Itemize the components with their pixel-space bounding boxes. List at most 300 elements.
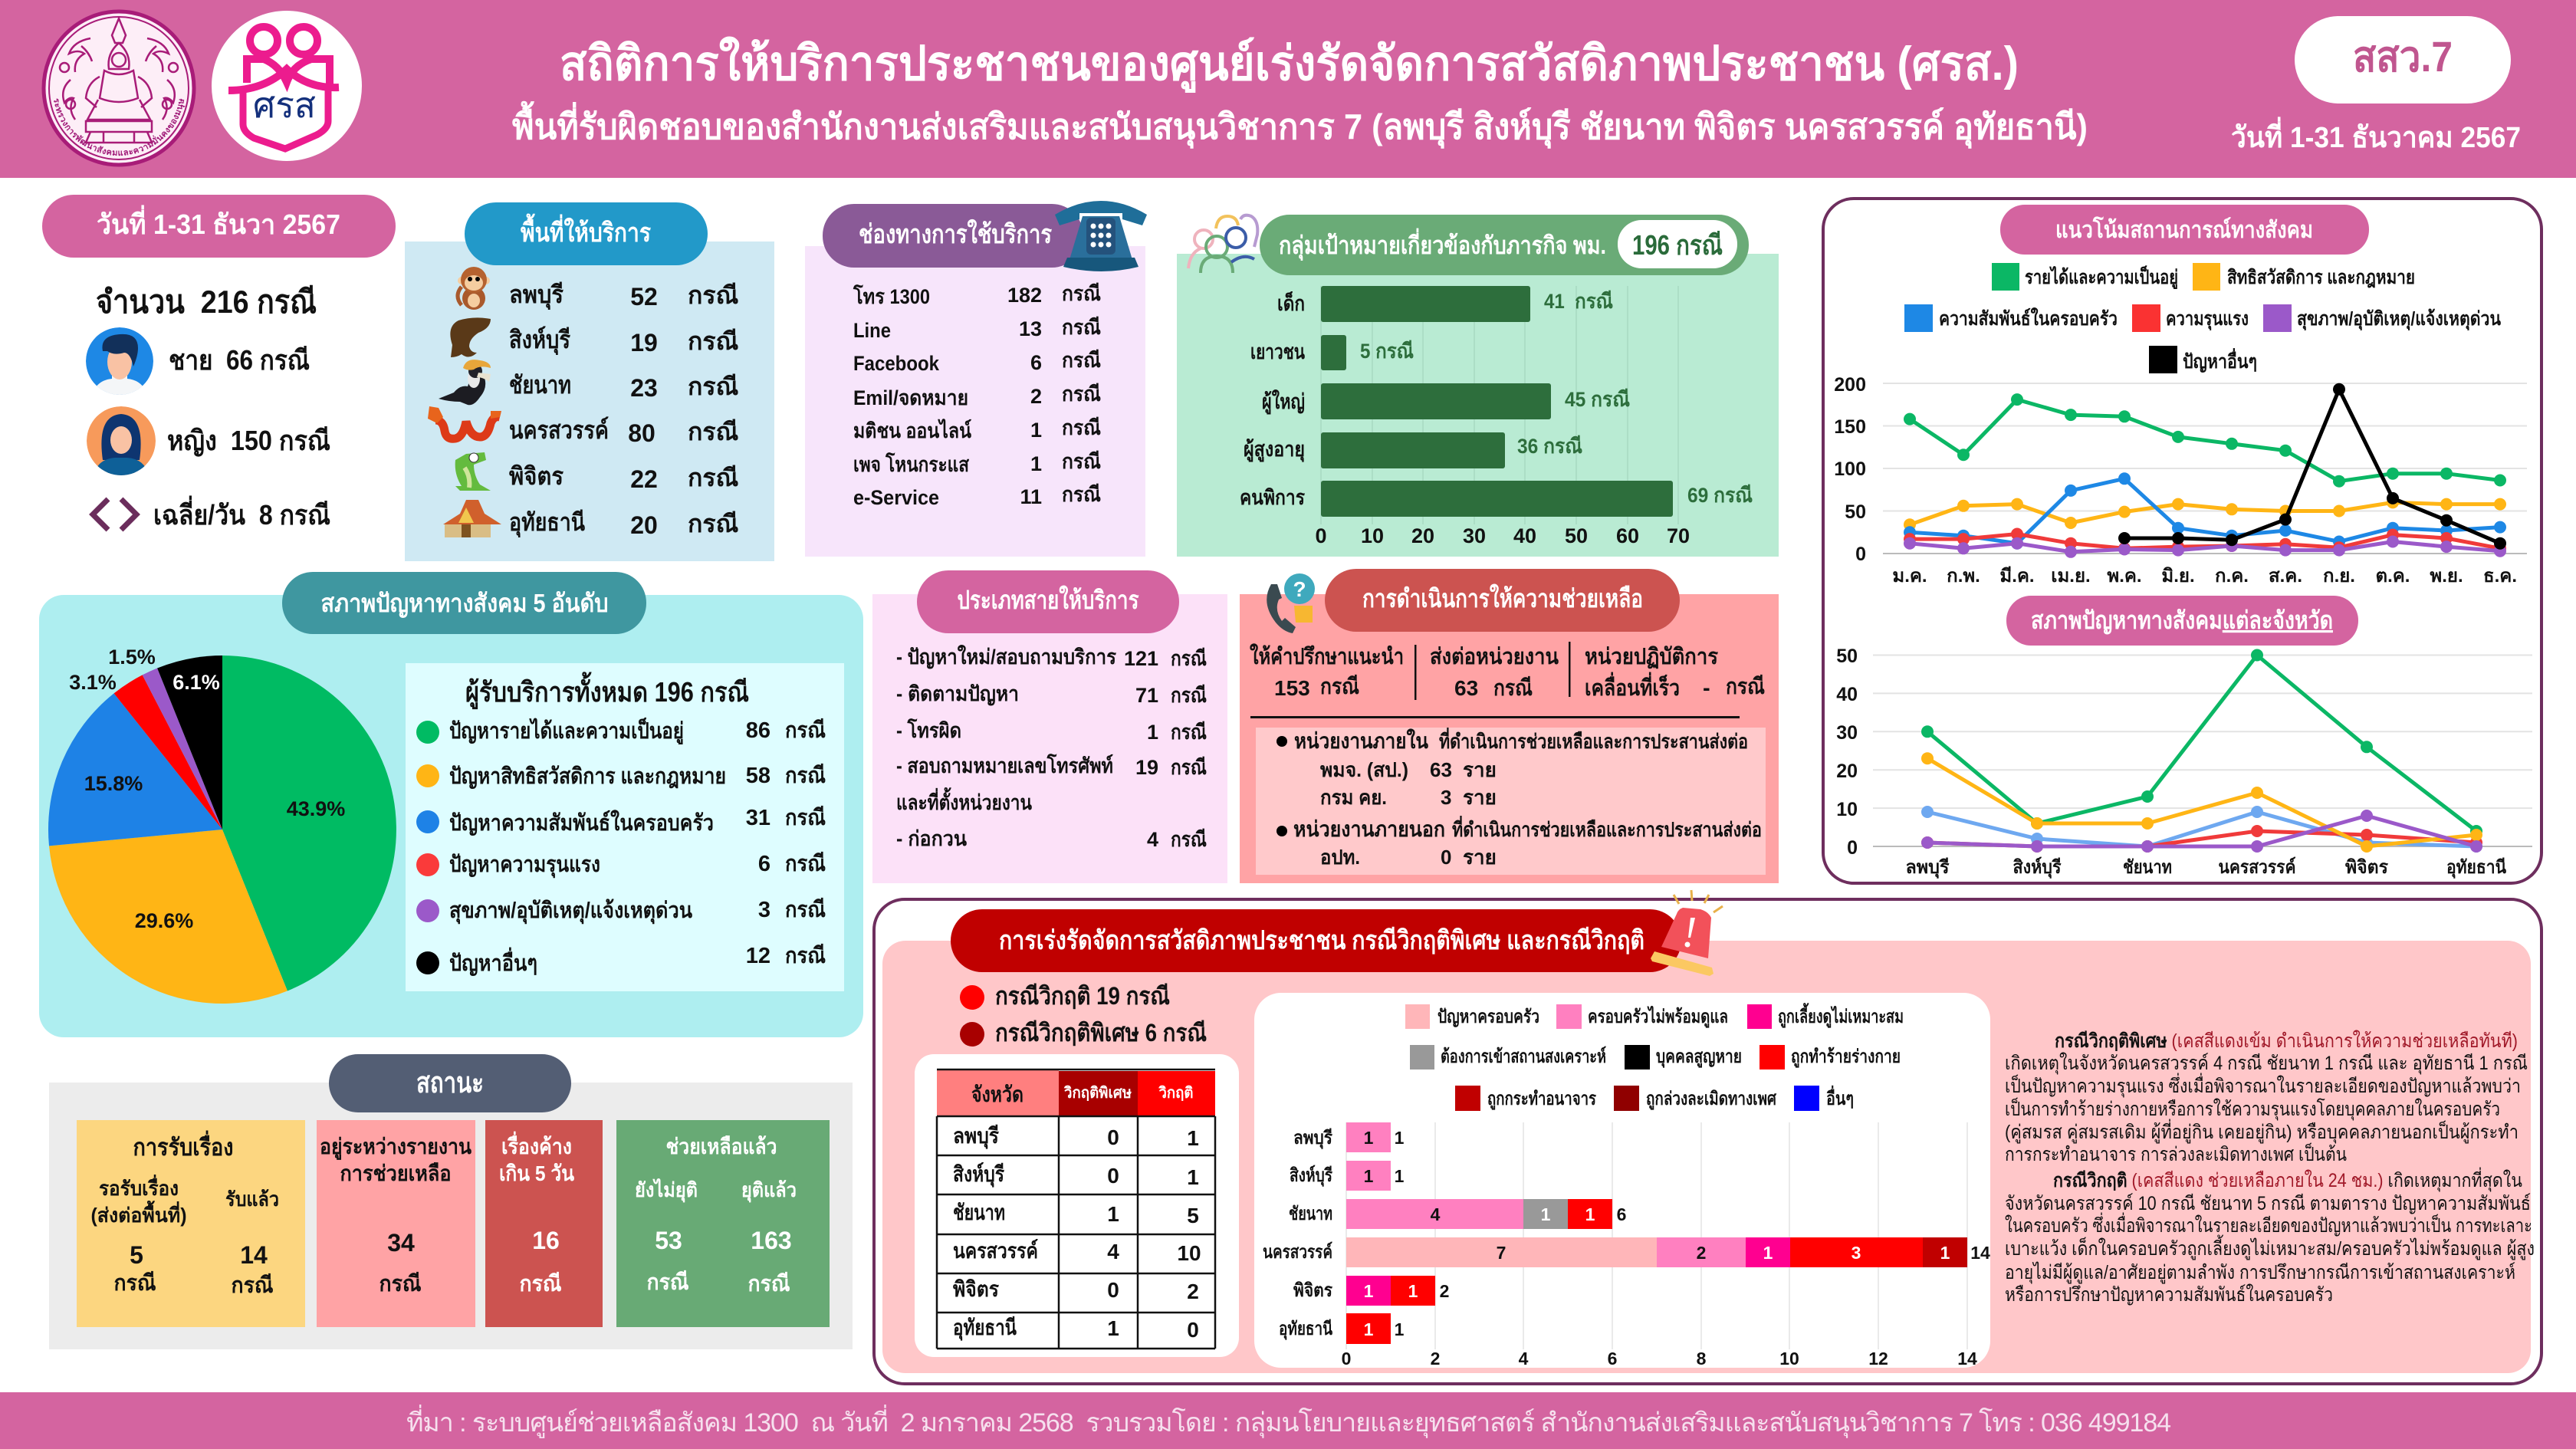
list: provinces: กรณี: [688, 464, 738, 491]
stats: assistance columns: หน่วยปฏิบัติการ: [1585, 645, 1718, 669]
line chart: monthly trend: 150: [1834, 416, 1866, 438]
legend: crisis types: อื่นๆ: [1826, 1085, 1854, 1109]
list: channels: กรณี: [1062, 416, 1101, 439]
panel: service types: [872, 570, 1227, 883]
list: channels: มติชน ออนไลน์: [853, 419, 971, 442]
table: crisis by province: 1: [1107, 1202, 1119, 1226]
panel: social trend charts: [1823, 199, 2542, 883]
line chart: per province: 50: [1836, 646, 1858, 667]
stacked bar chart: crisis types: 1: [1408, 1281, 1418, 1301]
bar chart: target groups: 41 กรณี: [1544, 290, 1613, 313]
stats: assistance columns: ให้คำปรึกษาแนะนำ: [1250, 643, 1404, 669]
panel: assisting agencies: พมจ. (สป.): [1320, 758, 1408, 781]
text block: crisis explanation: การกระทำอนาจาร การล่วงละเมิดทางเพศ เป็นต้น: [2005, 1142, 2347, 1165]
list: service types: - โทรผิด: [896, 718, 961, 742]
card: in progress: กรณี: [379, 1272, 422, 1296]
stats: assistance columns: 153: [1274, 676, 1310, 700]
bar chart: target groups: 45 กรณี: [1565, 388, 1630, 411]
list: service types: 71: [1135, 684, 1158, 707]
card: intake: 5: [130, 1241, 143, 1269]
icon: ministry seal: [41, 9, 196, 167]
list: service types: - สอบถามหมายเลขโทรศัพท์: [896, 753, 1113, 777]
line chart: per province: 0: [1847, 837, 1858, 859]
legend: issues: ผู้รับบริการทั้งหมด 196 กรณี: [465, 672, 749, 710]
text block: crisis explanation: หรือการปรึกษาปัญหาความสัมพันธ์ในครอบครัว: [2005, 1283, 2333, 1306]
card: intake: รอรับเรื่อง: [99, 1174, 179, 1200]
table: crisis by province: [915, 1054, 1239, 1357]
panel: assisting agencies: 63: [1430, 758, 1452, 781]
list: provinces: [509, 281, 738, 539]
stacked bar chart: crisis types: 1: [1364, 1128, 1374, 1148]
list: service types: และที่ตั้งหน่วยงาน: [896, 787, 1032, 814]
table: crisis by province: จังหวัด: [971, 1083, 1024, 1106]
bar chart: target groups: 30: [1463, 524, 1486, 547]
list: channels: กรณี: [1062, 383, 1101, 406]
bar chart: target groups: 69 กรณี: [1687, 484, 1753, 507]
legend: issues: สุขภาพ/อุบัติเหตุ/แจ้งเหตุด่วน: [449, 899, 692, 924]
badge: สสว.7: สสว.7: [2353, 32, 2453, 80]
list: channels: 182: [1007, 284, 1042, 307]
stacked bar chart: crisis types: 6: [1608, 1349, 1617, 1368]
legend: issues: 3: [758, 898, 770, 922]
table: crisis by province: ลพบุรี: [953, 1124, 999, 1149]
stacked bar chart: crisis types: 1: [1541, 1204, 1551, 1224]
table: crisis by province: วิกฤติพิเศษ: [1063, 1085, 1132, 1102]
list: provinces: กรณี: [688, 373, 738, 400]
stacked bar chart: crisis types: 14: [1970, 1243, 1990, 1263]
panel: assistance actions: [1240, 569, 1779, 883]
legend: crisis types: ครอบครัวไม่พร้อมดูแล: [1588, 1005, 1728, 1028]
table: crisis by province: นครสวรรค์: [953, 1239, 1038, 1263]
list: service types: - ปัญหาใหม่/สอบถามบริการ: [896, 645, 1116, 669]
heading: social issues: [282, 572, 646, 634]
list: provinces: นครสวรรค์: [509, 416, 609, 444]
list: provinces: สิงห์บุรี: [509, 326, 570, 356]
legend: issues: กรณี: [785, 764, 826, 788]
bar chart: target groups: ผู้ใหญ่: [1262, 389, 1305, 415]
card: resolved: 163: [751, 1227, 792, 1254]
stacked bar chart: crisis types: 1: [1395, 1319, 1405, 1339]
list: provinces: 80: [628, 419, 656, 447]
list: channels: โทร 1300: [853, 284, 930, 308]
line chart: per province: พิจิตร: [2345, 857, 2388, 878]
line chart: per province: 10: [1836, 799, 1858, 820]
legend: trend: ความรุนแรง: [2166, 308, 2249, 331]
line chart: monthly trend: เม.ย.: [2051, 566, 2091, 586]
card: resolved: [616, 1120, 830, 1327]
line chart: per province: 20: [1836, 761, 1858, 782]
panel: social issues top 5: [39, 572, 863, 1037]
bar chart: target groups: เด็ก: [1277, 290, 1305, 315]
stacked bar chart: crisis types: นครสวรรค์: [1263, 1241, 1332, 1263]
icon: temple: [443, 500, 501, 537]
card: resolved: กรณี: [748, 1272, 790, 1296]
table: crisis by province: พิจิตร: [953, 1277, 999, 1301]
panel: assisting agencies: หน่วยงานภายใน: [1294, 728, 1428, 753]
table: crisis by province: 1: [1107, 1316, 1119, 1340]
table: crisis by province: สิงห์บุรี: [953, 1162, 1004, 1188]
card: resolved: ช่วยเหลือแล้ว: [665, 1135, 777, 1158]
bar chart: target groups: 0: [1315, 524, 1327, 547]
legend: crisis types: ถูกเลี้ยงดูไม่เหมาะสม: [1778, 1002, 1904, 1028]
line chart: monthly trend: 0: [1855, 544, 1866, 565]
stacked bar chart: crisis types: 1: [1364, 1281, 1374, 1301]
legend: issues: [406, 663, 844, 991]
line chart: per province: ลพบุรี: [1906, 857, 1950, 879]
text block: crisis explanation: กรณีวิกฤติ (เคสสีแดง ช่วยเหลือภายใน 24 ชม.) เกิดเหตุมากที่สุดใน: [2053, 1167, 2522, 1192]
subtitle: พื้นที่รับผิดชอบของสำนักงานส่งเสริมและสนับสนุนวิชาการ 7 (ลพบุรี สิงห์บุรี ชัยนาท พิจิตร นครสวรรค์ อุทัยธานี): [512, 100, 2088, 149]
stacked bar chart: crisis types: ลพบุรี: [1293, 1128, 1332, 1150]
bar chart: target groups: 40: [1513, 524, 1536, 547]
heading: target groups: [1260, 215, 1749, 275]
card: in progress: การช่วยเหลือ: [340, 1162, 451, 1185]
legend: issues: 6: [758, 852, 770, 876]
list: provinces: ลพบุรี: [509, 281, 564, 310]
table: crisis by province: 1: [1187, 1165, 1199, 1189]
totals block: เฉลี่ย/วัน 8 กรณี: [153, 495, 330, 531]
table: crisis by province: 0: [1107, 1125, 1119, 1149]
list: service types: 121: [1124, 647, 1158, 670]
card: overdue: [485, 1120, 603, 1327]
card: overdue: เรื่องค้าง: [501, 1131, 572, 1158]
totals block: จำนวน 216 กรณี: [96, 284, 317, 320]
panel: assisting agencies: 0: [1441, 846, 1451, 869]
list: provinces: 20: [630, 511, 658, 539]
bar chart: target groups: 50: [1565, 524, 1588, 547]
line chart: per province: ชัยนาท: [2123, 857, 2172, 878]
legend: trend: ความสัมพันธ์ในครอบครัว: [1939, 307, 2118, 330]
bar chart: target groups: 10: [1361, 524, 1384, 547]
stacked bar chart: crisis types: 4: [1431, 1204, 1441, 1224]
bar chart: target groups: 5 กรณี: [1360, 340, 1414, 363]
legend: crisis types: ต้องการเข้าสถานสงเคราะห์: [1441, 1046, 1606, 1067]
heading: trend: [2000, 205, 2369, 255]
stats: assistance columns: -: [1703, 676, 1710, 701]
panel: status: [49, 1054, 853, 1349]
stacked bar chart: crisis types: 6: [1617, 1204, 1626, 1224]
heading: status: สถานะ: [416, 1067, 484, 1099]
table: crisis by province: 10: [1177, 1241, 1201, 1265]
list: service types: กรณี: [1171, 684, 1207, 707]
heading: trend: แนวโน้มสถานการณ์ทางสังคม: [2055, 215, 2313, 243]
list: service types: 19: [1135, 756, 1158, 779]
table: crisis by province: 2: [1187, 1280, 1199, 1303]
list: service types: - ก่อกวน: [896, 827, 967, 850]
list: channels: กรณี: [1062, 483, 1101, 506]
list: channels: [853, 282, 1101, 509]
card: resolved: กรณี: [647, 1270, 689, 1295]
table: crisis by province: ชัยนาท: [953, 1201, 1005, 1224]
line chart: per province: นครสวรรค์: [2219, 856, 2295, 878]
card: overdue: กรณี: [520, 1272, 562, 1296]
heading: service types: ประเภทสายให้บริการ: [957, 585, 1139, 614]
stacked bar chart: crisis types: 14: [1957, 1349, 1977, 1368]
list: channels: กรณี: [1062, 450, 1101, 473]
panel: target groups: [1177, 215, 1779, 557]
list: channels: กรณี: [1062, 316, 1101, 339]
badge: สสว.7: [2295, 16, 2511, 104]
line chart: monthly trend: 200: [1834, 374, 1866, 396]
legend: trend: ปัญหาอื่นๆ: [2183, 348, 2257, 373]
footer: ที่มา : ระบบศูนย์ช่วยเหลือสังคม 1300 ณ วันที่ 2 มกราคม 2568 รวบรวมโดย : กลุ่มนโยบายและยุทธศาสตร์ สำนักงานส่งเสริมและสนับสนุนวิชาการ 7 โทร : 036 499184: [406, 1405, 2171, 1438]
icon: fish: [450, 317, 491, 357]
line chart: monthly trend: [1834, 374, 2527, 586]
legend: crisis types: ถูกทำร้ายร่างกาย: [1791, 1046, 1901, 1068]
list: service types: กรณี: [1171, 647, 1207, 670]
panel: assisting agencies: ที่ดำเนินการช่วยเหลือและการประสานส่งต่อ: [1452, 815, 1762, 841]
heading: assistance: [1325, 569, 1680, 632]
panel: assisting agencies: ราย: [1463, 758, 1497, 781]
card: intake: [77, 1120, 305, 1327]
line chart: per province: [1836, 646, 2532, 879]
stacked bar chart: crisis types: 1: [1395, 1166, 1405, 1186]
legend: issues: 86: [746, 718, 770, 743]
legend: issues: ปัญหาอื่นๆ: [449, 947, 537, 977]
panel: assisting agencies: อปท.: [1320, 846, 1360, 869]
stacked bar chart: crisis types: 1: [1364, 1319, 1374, 1339]
panel: assisting agencies: [1256, 727, 1766, 875]
card: intake: (ส่งต่อพื้นที่): [90, 1200, 187, 1227]
stacked bar chart: crisis types: สิงห์บุรี: [1290, 1165, 1332, 1188]
line chart: monthly trend: พ.ค.: [2107, 566, 2142, 586]
line chart: monthly trend: ก.ย.: [2323, 566, 2355, 586]
table: crisis by province: วิกฤติ: [1158, 1085, 1193, 1102]
bar chart: target groups: เยาวชน: [1250, 340, 1305, 363]
legend: trend: สิทธิสวัสดิการ และกฎหมาย: [2227, 267, 2415, 288]
pie chart: [48, 646, 396, 1004]
panel: assisting agencies: ที่ดำเนินการช่วยเหลือและการประสานส่งต่อ: [1439, 727, 1748, 753]
legend: issues: ปัญหาความรุนแรง: [449, 853, 600, 878]
icon: people group: [1188, 215, 1257, 273]
table: crisis by province: 5: [1187, 1204, 1199, 1227]
stacked bar chart: crisis types: 3: [1852, 1243, 1861, 1263]
legend: crisis counts: [960, 982, 1207, 1046]
list: channels: 2: [1030, 385, 1042, 408]
heading: service types: [917, 570, 1179, 633]
line chart: monthly trend: ก.พ.: [1947, 566, 1980, 586]
heading: target groups: 196 กรณี: [1632, 229, 1723, 261]
panel: assisting agencies: หน่วยงานภายนอก: [1293, 817, 1445, 841]
heading: target groups: กลุ่มเป้าหมายเกี่ยวข้องกับภารกิจ พม.: [1279, 228, 1606, 261]
list: channels: 6: [1030, 351, 1042, 374]
stacked bar chart: crisis types: 1: [1395, 1128, 1405, 1148]
card: intake: รับแล้ว: [225, 1188, 279, 1211]
line chart: per province: 30: [1836, 722, 1858, 744]
stacked bar chart: crisis types: 1: [1763, 1243, 1773, 1263]
card: overdue: 16: [532, 1227, 560, 1254]
card: resolved: ยุติแล้ว: [741, 1178, 797, 1203]
list: channels: e-Service: [853, 486, 939, 509]
card: intake: กรณี: [113, 1271, 156, 1296]
legend: issues: กรณี: [785, 944, 826, 968]
stacked bar chart: crisis types: อุทัยธานี: [1279, 1319, 1332, 1341]
legend: crisis counts: กรณีวิกฤติ 19 กรณี: [995, 982, 1170, 1010]
stacked bar chart: crisis types: 1: [1585, 1204, 1595, 1224]
date pill: [42, 195, 396, 258]
icon: woman: [87, 406, 156, 479]
pie chart: 29.6%: [135, 909, 193, 932]
heading: channels: [823, 204, 1083, 268]
stacked bar chart: crisis types: พิจิตร: [1293, 1280, 1332, 1301]
stacked bar chart: crisis types: [1254, 993, 1990, 1368]
heading: per province: สภาพปัญหาทางสังคมแต่ละจังหวัด: [2031, 606, 2333, 635]
legend: issues: กรณี: [785, 898, 826, 922]
legend: crisis counts: กรณีวิกฤติพิเศษ 6 กรณี: [995, 1019, 1207, 1046]
title: สถิติการให้บริการประชาชนของศูนย์เร่งรัดจัดการสวัสดิภาพประชาชน (ศรส.): [560, 36, 2019, 93]
legend: crisis types: ปัญหาครอบครัว: [1438, 1007, 1539, 1027]
pie chart: 43.9%: [287, 797, 345, 820]
heading: crisis: [951, 909, 1681, 972]
panel: assisting agencies: ราย: [1463, 846, 1497, 869]
legend: crisis types: ถูกกระทำอนาจาร: [1487, 1089, 1596, 1110]
line chart: monthly trend: ส.ค.: [2269, 566, 2302, 586]
stacked bar chart: crisis types: ชัยนาท: [1289, 1204, 1332, 1224]
list: service types: - ติดตามปัญหา: [896, 682, 1019, 706]
heading: service area: [465, 202, 708, 265]
list: provinces: กรณี: [688, 327, 738, 355]
totals block: หญิง 150 กรณี: [167, 425, 330, 457]
table: crisis by province: 4: [1107, 1240, 1119, 1263]
list: provinces: กรณี: [688, 510, 738, 537]
list: channels: 11: [1020, 485, 1042, 508]
list: service types: [896, 645, 1207, 851]
bar chart: target groups: คนพิการ: [1240, 486, 1305, 509]
icon: man: [86, 327, 153, 399]
table: crisis by province: 0: [1107, 1164, 1119, 1188]
table: crisis by province: อุทัยธานี: [953, 1316, 1017, 1341]
line chart: monthly trend: ต.ค.: [2376, 566, 2410, 586]
card: overdue: เกิน 5 วัน: [499, 1162, 574, 1185]
line chart: monthly trend: ธ.ค.: [2483, 566, 2517, 586]
text block: crisis explanation: [2005, 1030, 2535, 1306]
bar chart: target groups: [1240, 286, 1753, 547]
header date: วันที่ 1-31 ธันวาคม 2567: [2231, 117, 2521, 154]
bar chart: target groups: 70: [1667, 524, 1690, 547]
list: provinces: ชัยนาท: [509, 371, 571, 399]
icon: ศรส logo: ศรส: [253, 85, 316, 125]
line chart: monthly trend: ก.ค.: [2215, 566, 2249, 586]
panel: service channels: [805, 201, 1147, 557]
line chart: monthly trend: มี.ค.: [1999, 566, 2035, 586]
stats: assistance columns: กรณี: [1493, 676, 1533, 701]
list: provinces: 52: [630, 283, 658, 310]
icon: telephone: [1055, 201, 1147, 271]
list: provinces: 22: [630, 465, 658, 493]
bar chart: target groups: 36 กรณี: [1517, 435, 1582, 458]
legend: issues: กรณี: [785, 806, 826, 830]
heading: status: [329, 1054, 571, 1112]
panel: assisting agencies: 3: [1441, 786, 1451, 809]
pie chart: 1.5%: [108, 646, 156, 669]
totals block: [86, 284, 330, 531]
list: channels: กรณี: [1062, 349, 1101, 372]
icon: ศรส logo: [212, 11, 362, 161]
stacked bar chart: crisis types: 1: [1940, 1243, 1950, 1263]
bar chart: target groups: 20: [1411, 524, 1434, 547]
panel: assisting agencies: กรม คย.: [1320, 786, 1387, 809]
list: channels: 1: [1030, 452, 1042, 475]
list: service types: กรณี: [1171, 828, 1207, 851]
legend: crisis types: [1405, 1002, 1904, 1111]
panel: service area: [405, 202, 774, 561]
stacked bar chart: crisis types: 2: [1440, 1281, 1449, 1301]
legend: issues: 58: [746, 764, 770, 788]
list: provinces: 23: [630, 374, 658, 402]
line chart: monthly trend: 50: [1845, 501, 1866, 523]
line chart: per province: อุทัยธานี: [2446, 857, 2507, 879]
icon: crocodile: [455, 452, 491, 491]
icon: call help: [1267, 573, 1315, 633]
list: provinces: อุทัยธานี: [509, 508, 585, 538]
heading: per province: [2006, 596, 2358, 646]
stats: assistance columns: กรณี: [1726, 675, 1765, 699]
heading: assistance: การดำเนินการให้ความช่วยเหลือ: [1362, 583, 1643, 613]
card: resolved: 53: [655, 1227, 682, 1254]
icon: hornbill: [439, 360, 491, 405]
pie chart: 3.1%: [69, 671, 117, 694]
list: service types: 1: [1147, 721, 1158, 744]
icon: dragon: [428, 406, 501, 439]
legend: issues: ปัญหาความสัมพันธ์ในครอบครัว: [449, 810, 714, 836]
legend: issues: กรณี: [785, 718, 826, 743]
card: in progress: 34: [387, 1229, 415, 1257]
list: channels: 13: [1019, 317, 1042, 340]
legend: crisis types: บุคคลสูญหาย: [1656, 1046, 1742, 1069]
bar chart: target groups: 60: [1616, 524, 1639, 547]
legend: trend: สุขภาพ/อุบัติเหตุ/แจ้งเหตุด่วน: [2297, 308, 2501, 331]
heading: channels: ช่องทางการใช้บริการ: [859, 219, 1053, 249]
stats: assistance columns: 63: [1454, 676, 1478, 700]
stacked bar chart: crisis types: 7: [1497, 1243, 1506, 1263]
legend: crisis types: ถูกล่วงละเมิดทางเพศ: [1646, 1089, 1777, 1110]
heading: social issues: สภาพปัญหาทางสังคม 5 อันดับ: [320, 589, 609, 618]
legend: issues: ปัญหาสิทธิสวัสดิการ และกฎหมาย: [449, 764, 726, 790]
legend: trend: รายได้และความเป็นอยู่: [2025, 265, 2178, 290]
line chart: monthly trend: 100: [1834, 458, 1866, 480]
pie chart: 6.1%: [172, 671, 220, 694]
card: in progress: อยู่ระหว่างรายงาน: [320, 1135, 472, 1160]
stacked bar chart: crisis types: 2: [1431, 1349, 1440, 1368]
heading: crisis: การเร่งรัดจัดการสวัสดิภาพประชาชน กรณีวิกฤติพิเศษ และกรณีวิกฤติ: [999, 926, 1644, 955]
line chart: monthly trend: มิ.ย.: [2161, 566, 2195, 586]
line chart: per province: 40: [1836, 684, 1858, 705]
line chart: monthly trend: ม.ค.: [1892, 566, 1927, 586]
list: channels: Facebook: [853, 352, 940, 375]
stacked bar chart: crisis types: 12: [1868, 1349, 1888, 1368]
card: in progress: [317, 1120, 475, 1327]
text block: crisis explanation: กรณีวิกฤติพิเศษ (เคสสีแดงเข้ม ดำเนินการให้ความช่วยเหลือทันที): [2055, 1030, 2518, 1052]
list: channels: เพจ โหนกระแส: [853, 452, 969, 476]
line chart: per province: สิงห์บุรี: [2013, 856, 2062, 879]
list: provinces: กรณี: [688, 418, 738, 445]
panel: assisting agencies: ราย: [1463, 786, 1497, 809]
stacked bar chart: crisis types: 1: [1364, 1166, 1374, 1186]
list: channels: กรณี: [1062, 282, 1101, 305]
list: channels: Line: [853, 319, 891, 342]
header banner: [0, 0, 2576, 178]
list: provinces: กรณี: [688, 281, 738, 309]
bar chart: target groups: ผู้สูงอายุ: [1244, 438, 1305, 462]
stats: assistance columns: [1250, 642, 1765, 718]
table: crisis by province: 0: [1187, 1318, 1199, 1342]
legend: issues: กรณี: [785, 852, 826, 876]
list: channels: 1: [1030, 419, 1042, 442]
card: intake: 14: [240, 1241, 268, 1269]
icon: monkey: [458, 267, 490, 310]
footer: [0, 1392, 2576, 1449]
list: service types: กรณี: [1171, 756, 1207, 779]
list: service types: กรณี: [1171, 721, 1207, 744]
